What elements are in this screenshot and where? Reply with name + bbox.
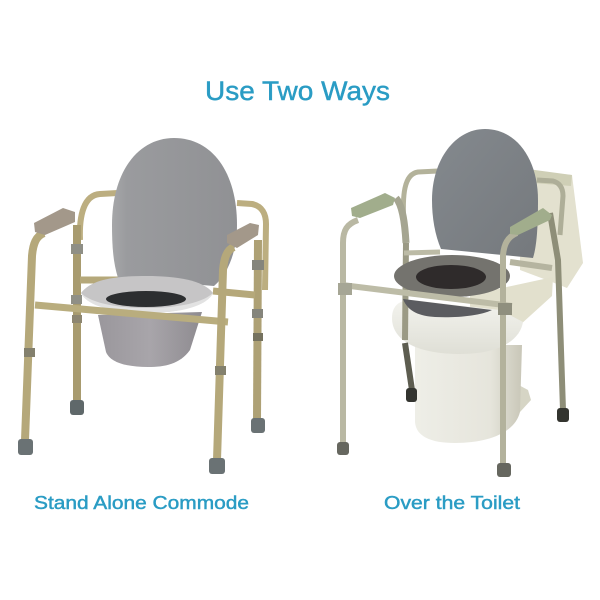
front frame and legs (337, 220, 517, 477)
backrest lid (112, 138, 237, 286)
bucket (403, 299, 492, 317)
title: Use Two Ways (205, 76, 390, 106)
backrest lid (432, 129, 538, 258)
toilet (392, 168, 583, 443)
illustration: stand alone commode (18, 138, 266, 474)
seat (81, 276, 213, 313)
caption: over the toilet: Over the Toilet (384, 493, 520, 513)
bucket (98, 312, 202, 367)
back frame and rear legs (396, 171, 569, 422)
armrests (351, 193, 552, 235)
caption: stand alone commode: Stand Alone Commode (34, 493, 249, 513)
illustration: over the toilet (337, 129, 583, 477)
armrests (34, 208, 259, 248)
seat (394, 255, 510, 297)
back frame and rear legs (70, 193, 266, 433)
front frame and legs (18, 233, 234, 474)
